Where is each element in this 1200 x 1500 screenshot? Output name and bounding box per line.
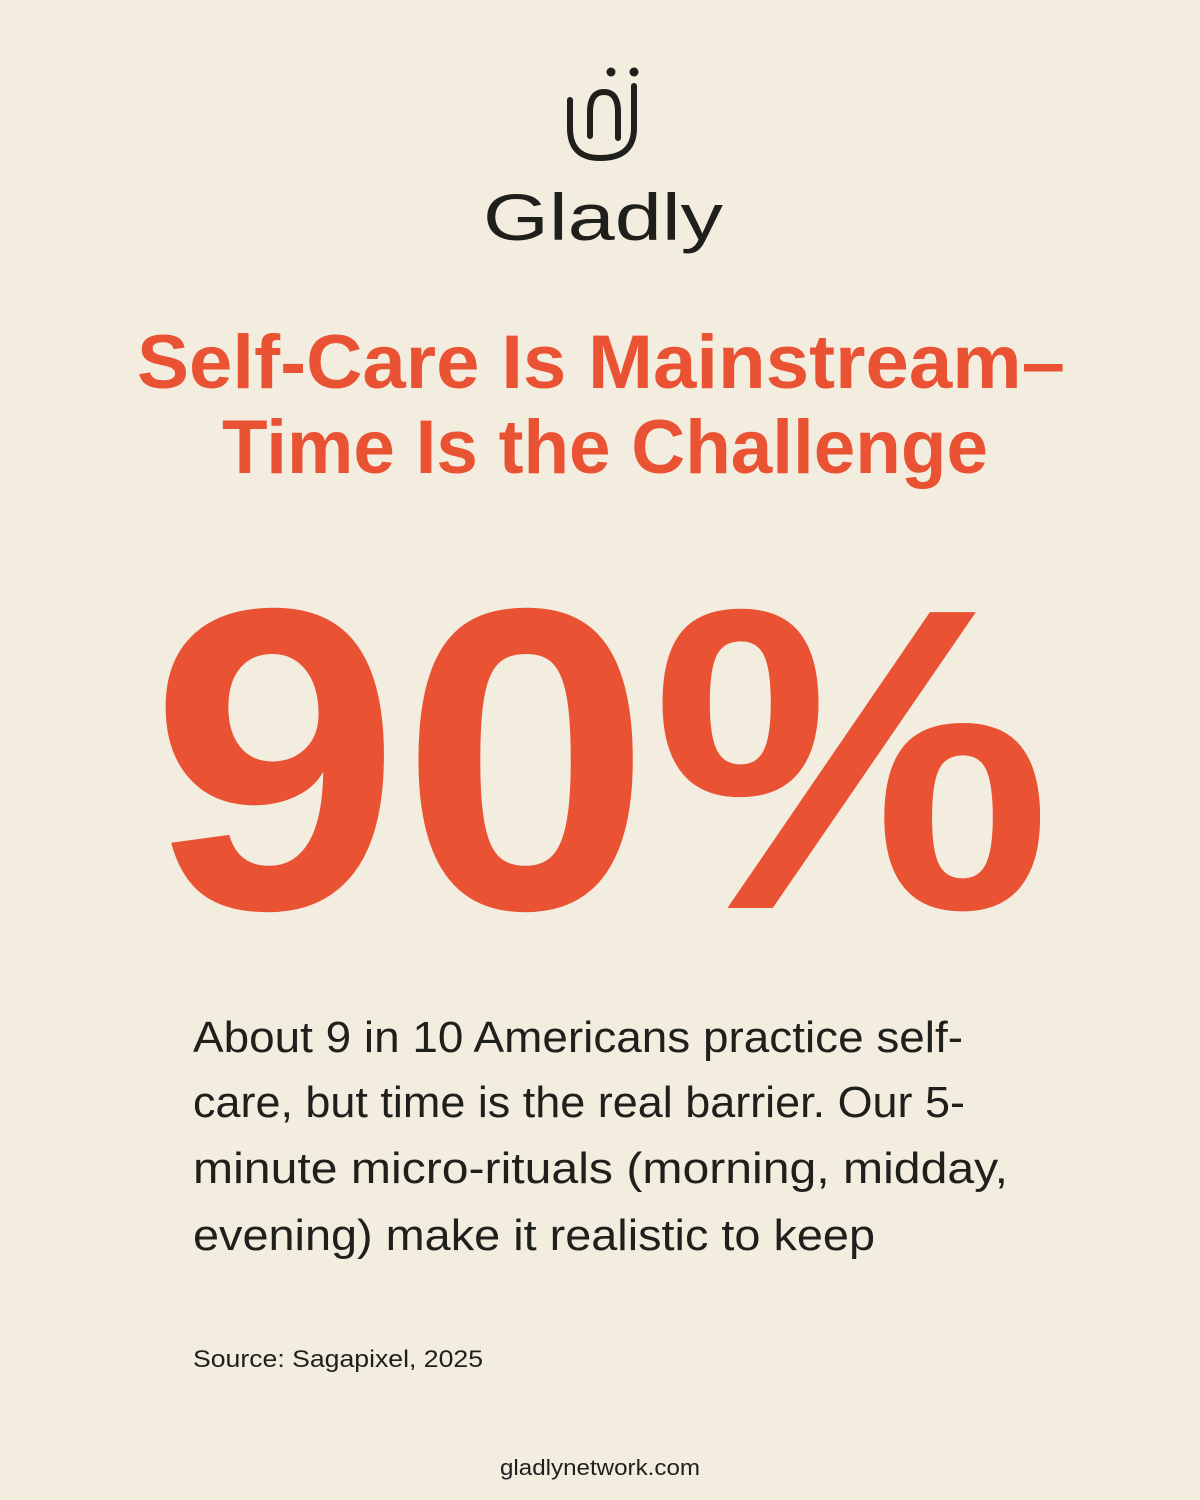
body text: About 9 in 10 Americans practice self- <box>193 1013 963 1062</box>
body text: evening) make it realistic to keep <box>193 1211 875 1260</box>
logo <box>483 68 723 254</box>
body text <box>193 1013 1008 1260</box>
body text: minute micro-rituals (morning, midday, <box>193 1144 1008 1193</box>
big stat 90%: 90% <box>150 520 1052 1000</box>
title: Time Is the Challenge <box>222 405 988 490</box>
body text: care, but time is the real barrier. Our 5- <box>193 1078 965 1127</box>
wordmark: Gladly <box>483 180 723 254</box>
title: Self-Care Is Mainstream– <box>137 320 1065 405</box>
source: Source: Sagapixel, 2025 <box>193 1346 483 1373</box>
title <box>137 320 1065 490</box>
footer url: gladlynetwork.com <box>500 1455 700 1480</box>
icon: logo mark <box>570 68 638 158</box>
